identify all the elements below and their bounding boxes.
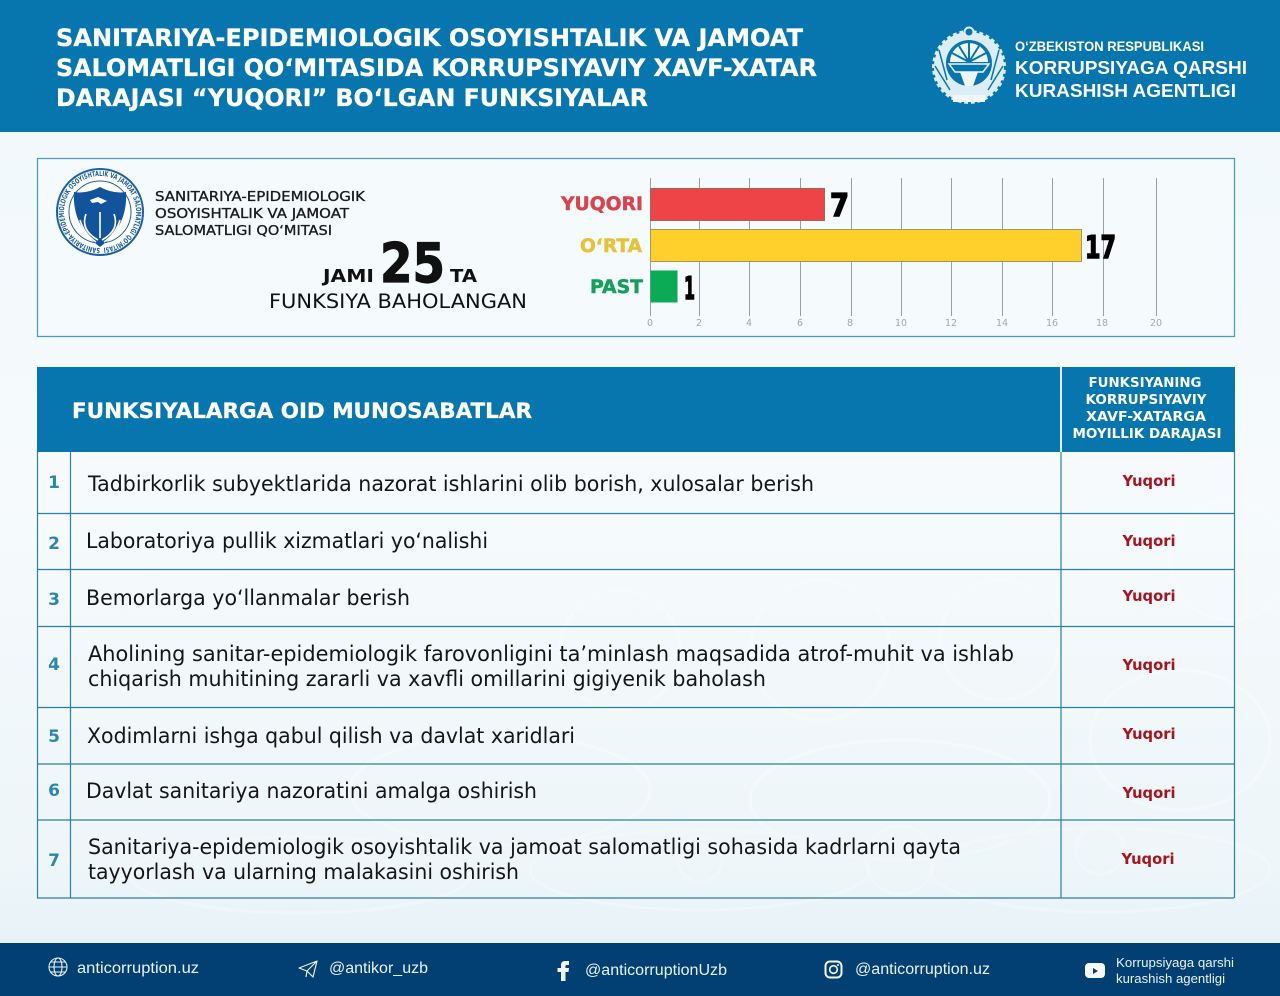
telegram link: @antikor_uzb bbox=[329, 960, 428, 977]
title: SANITARIYA-EPIDEMIOLOGIK OSOYISHTALIK VA JAMOAT bbox=[56, 24, 804, 52]
row 6 bbox=[48, 779, 1176, 803]
agency name bbox=[1015, 38, 1247, 101]
bar: orta: O‘RTA bbox=[580, 235, 642, 257]
facebook link: @anticorruptionUzb bbox=[585, 962, 727, 979]
bar chart: 10 bbox=[895, 318, 907, 329]
row 4 bbox=[48, 642, 1176, 691]
bar: past: PAST bbox=[590, 276, 643, 298]
table header: MOYILLIK DARAJASI bbox=[1072, 427, 1222, 442]
agency name: KURASHISH AGENTLIGI bbox=[1015, 80, 1236, 101]
header band bbox=[0, 0, 1280, 132]
bar chart: 0 bbox=[647, 318, 653, 329]
bar chart: 12 bbox=[945, 318, 957, 329]
bar chart: 20 bbox=[1150, 318, 1162, 329]
row 1: Yuqori bbox=[1122, 472, 1176, 490]
row 6: 6 bbox=[48, 781, 60, 801]
row 3: 3 bbox=[48, 590, 60, 610]
footer band bbox=[0, 943, 1280, 996]
bar chart: 2 bbox=[696, 318, 702, 329]
committee name bbox=[155, 190, 366, 239]
row 7: Yuqori bbox=[1121, 850, 1174, 868]
bar: orta bbox=[580, 230, 1116, 266]
table header bbox=[37, 367, 1235, 452]
row 4: 4 bbox=[48, 655, 60, 675]
table bbox=[37, 367, 1235, 898]
row 6: Yuqori bbox=[1122, 784, 1176, 802]
title: DARAJASI “YUQORI” BO‘LGAN FUNKSIYALAR bbox=[56, 84, 648, 112]
title: SALOMATLIGI QO‘MITASIDA KORRUPSIYAVIY XAVF-XATAR bbox=[56, 54, 817, 82]
bar: yuqori: 7 bbox=[830, 188, 849, 224]
table header: XAVF-XATARGA bbox=[1086, 410, 1206, 425]
row 6: Davlat sanitariya nazoratini amalga oshirish bbox=[86, 779, 537, 803]
youtube link: Korrupsiyaga qarshi bbox=[1116, 956, 1234, 970]
bar chart: 8 bbox=[847, 318, 853, 329]
row 1: 1 bbox=[48, 473, 60, 493]
bar chart: 6 bbox=[797, 318, 803, 329]
icon: state emblem bbox=[932, 28, 1006, 104]
table header: FUNKSIYALARGA OID MUNOSABATLAR bbox=[72, 399, 532, 423]
agency name: KORRUPSIYAGA QARSHI bbox=[1015, 57, 1247, 78]
row 7: Sanitariya-epidemiologik osoyishtalik va jamoat salomatligi sohasida kadrlarni qayta bbox=[88, 835, 961, 859]
row 7: 7 bbox=[48, 851, 60, 871]
youtube link: kurashish agentligi bbox=[1116, 972, 1225, 986]
row 2: 2 bbox=[48, 534, 60, 554]
facebook link bbox=[558, 961, 727, 981]
row 4: Yuqori bbox=[1122, 656, 1176, 674]
committee name: SALOMATLIGI QO‘MITASI bbox=[155, 224, 332, 239]
bar: yuqori bbox=[560, 188, 849, 224]
total count: 25 bbox=[380, 232, 445, 295]
row 3: Bemorlarga yo‘llanmalar berish bbox=[86, 586, 410, 610]
bar chart bbox=[560, 178, 1162, 329]
bar: yuqori: YUQORI bbox=[560, 193, 643, 215]
committee name: SANITARIYA-EPIDEMIOLOGIK bbox=[155, 190, 366, 205]
website link: anticorruption.uz bbox=[77, 960, 199, 977]
row 4: chiqarish muhitining zararli va xavfli omillarini gigiyenik baholash bbox=[88, 667, 766, 691]
bar: past bbox=[590, 270, 695, 307]
row 1 bbox=[48, 472, 1176, 496]
row 5: 5 bbox=[48, 727, 60, 747]
row 5: Xodimlarni ishga qabul qilish va davlat xaridlari bbox=[87, 724, 575, 748]
bar chart: 16 bbox=[1046, 318, 1058, 329]
row 7: tayyorlash va ularning malakasini oshirish bbox=[88, 860, 519, 884]
bar chart: 18 bbox=[1096, 318, 1108, 329]
website link bbox=[49, 958, 199, 977]
bar: past: 1 bbox=[684, 271, 695, 307]
row 3 bbox=[48, 586, 1176, 610]
agency name: O‘ZBEKISTON RESPUBLIKASI bbox=[1015, 38, 1204, 54]
total count bbox=[269, 232, 527, 313]
total count: FUNKSIYA BAHOLANGAN bbox=[269, 290, 527, 313]
row 2: Laboratoriya pullik xizmatlari yo‘nalishi bbox=[86, 529, 488, 553]
table grid bbox=[37, 452, 1234, 898]
table header: KORRUPSIYAVIY bbox=[1086, 393, 1207, 408]
row 2 bbox=[48, 529, 1176, 554]
table header: FUNKSIYANING bbox=[1088, 376, 1202, 391]
row 7 bbox=[48, 835, 1174, 884]
committee name: OSOYISHTALIK VA JAMOAT bbox=[155, 207, 349, 222]
instagram link: @anticorruption.uz bbox=[855, 961, 990, 978]
bar chart: 14 bbox=[996, 318, 1008, 329]
total count: TA bbox=[450, 266, 477, 287]
bar chart: 4 bbox=[746, 318, 752, 329]
icon: committee emblem: SANITARIYA-EPIDEMIOLOGIK OSOYISHTALIK VA JAMOAT SALOMATLIGI QO‘MITASI bbox=[58, 170, 142, 254]
row 2: Yuqori bbox=[1122, 532, 1176, 550]
row 5: Yuqori bbox=[1122, 725, 1176, 743]
row 3: Yuqori bbox=[1122, 587, 1176, 605]
youtube link bbox=[1085, 956, 1234, 986]
row 1: Tadbirkorlik subyektlarida nazorat ishlarini olib borish, xulosalar berish bbox=[87, 472, 814, 496]
panel: summary bbox=[36, 158, 1236, 338]
title bbox=[56, 24, 817, 112]
row 4: Aholining sanitar-epidemiologik farovonligini ta’minlash maqsadida atrof-muhit va ishlab bbox=[88, 642, 1014, 666]
row 5 bbox=[48, 724, 1176, 748]
bar: orta: 17 bbox=[1085, 230, 1116, 266]
total count: JAMI bbox=[321, 266, 374, 287]
